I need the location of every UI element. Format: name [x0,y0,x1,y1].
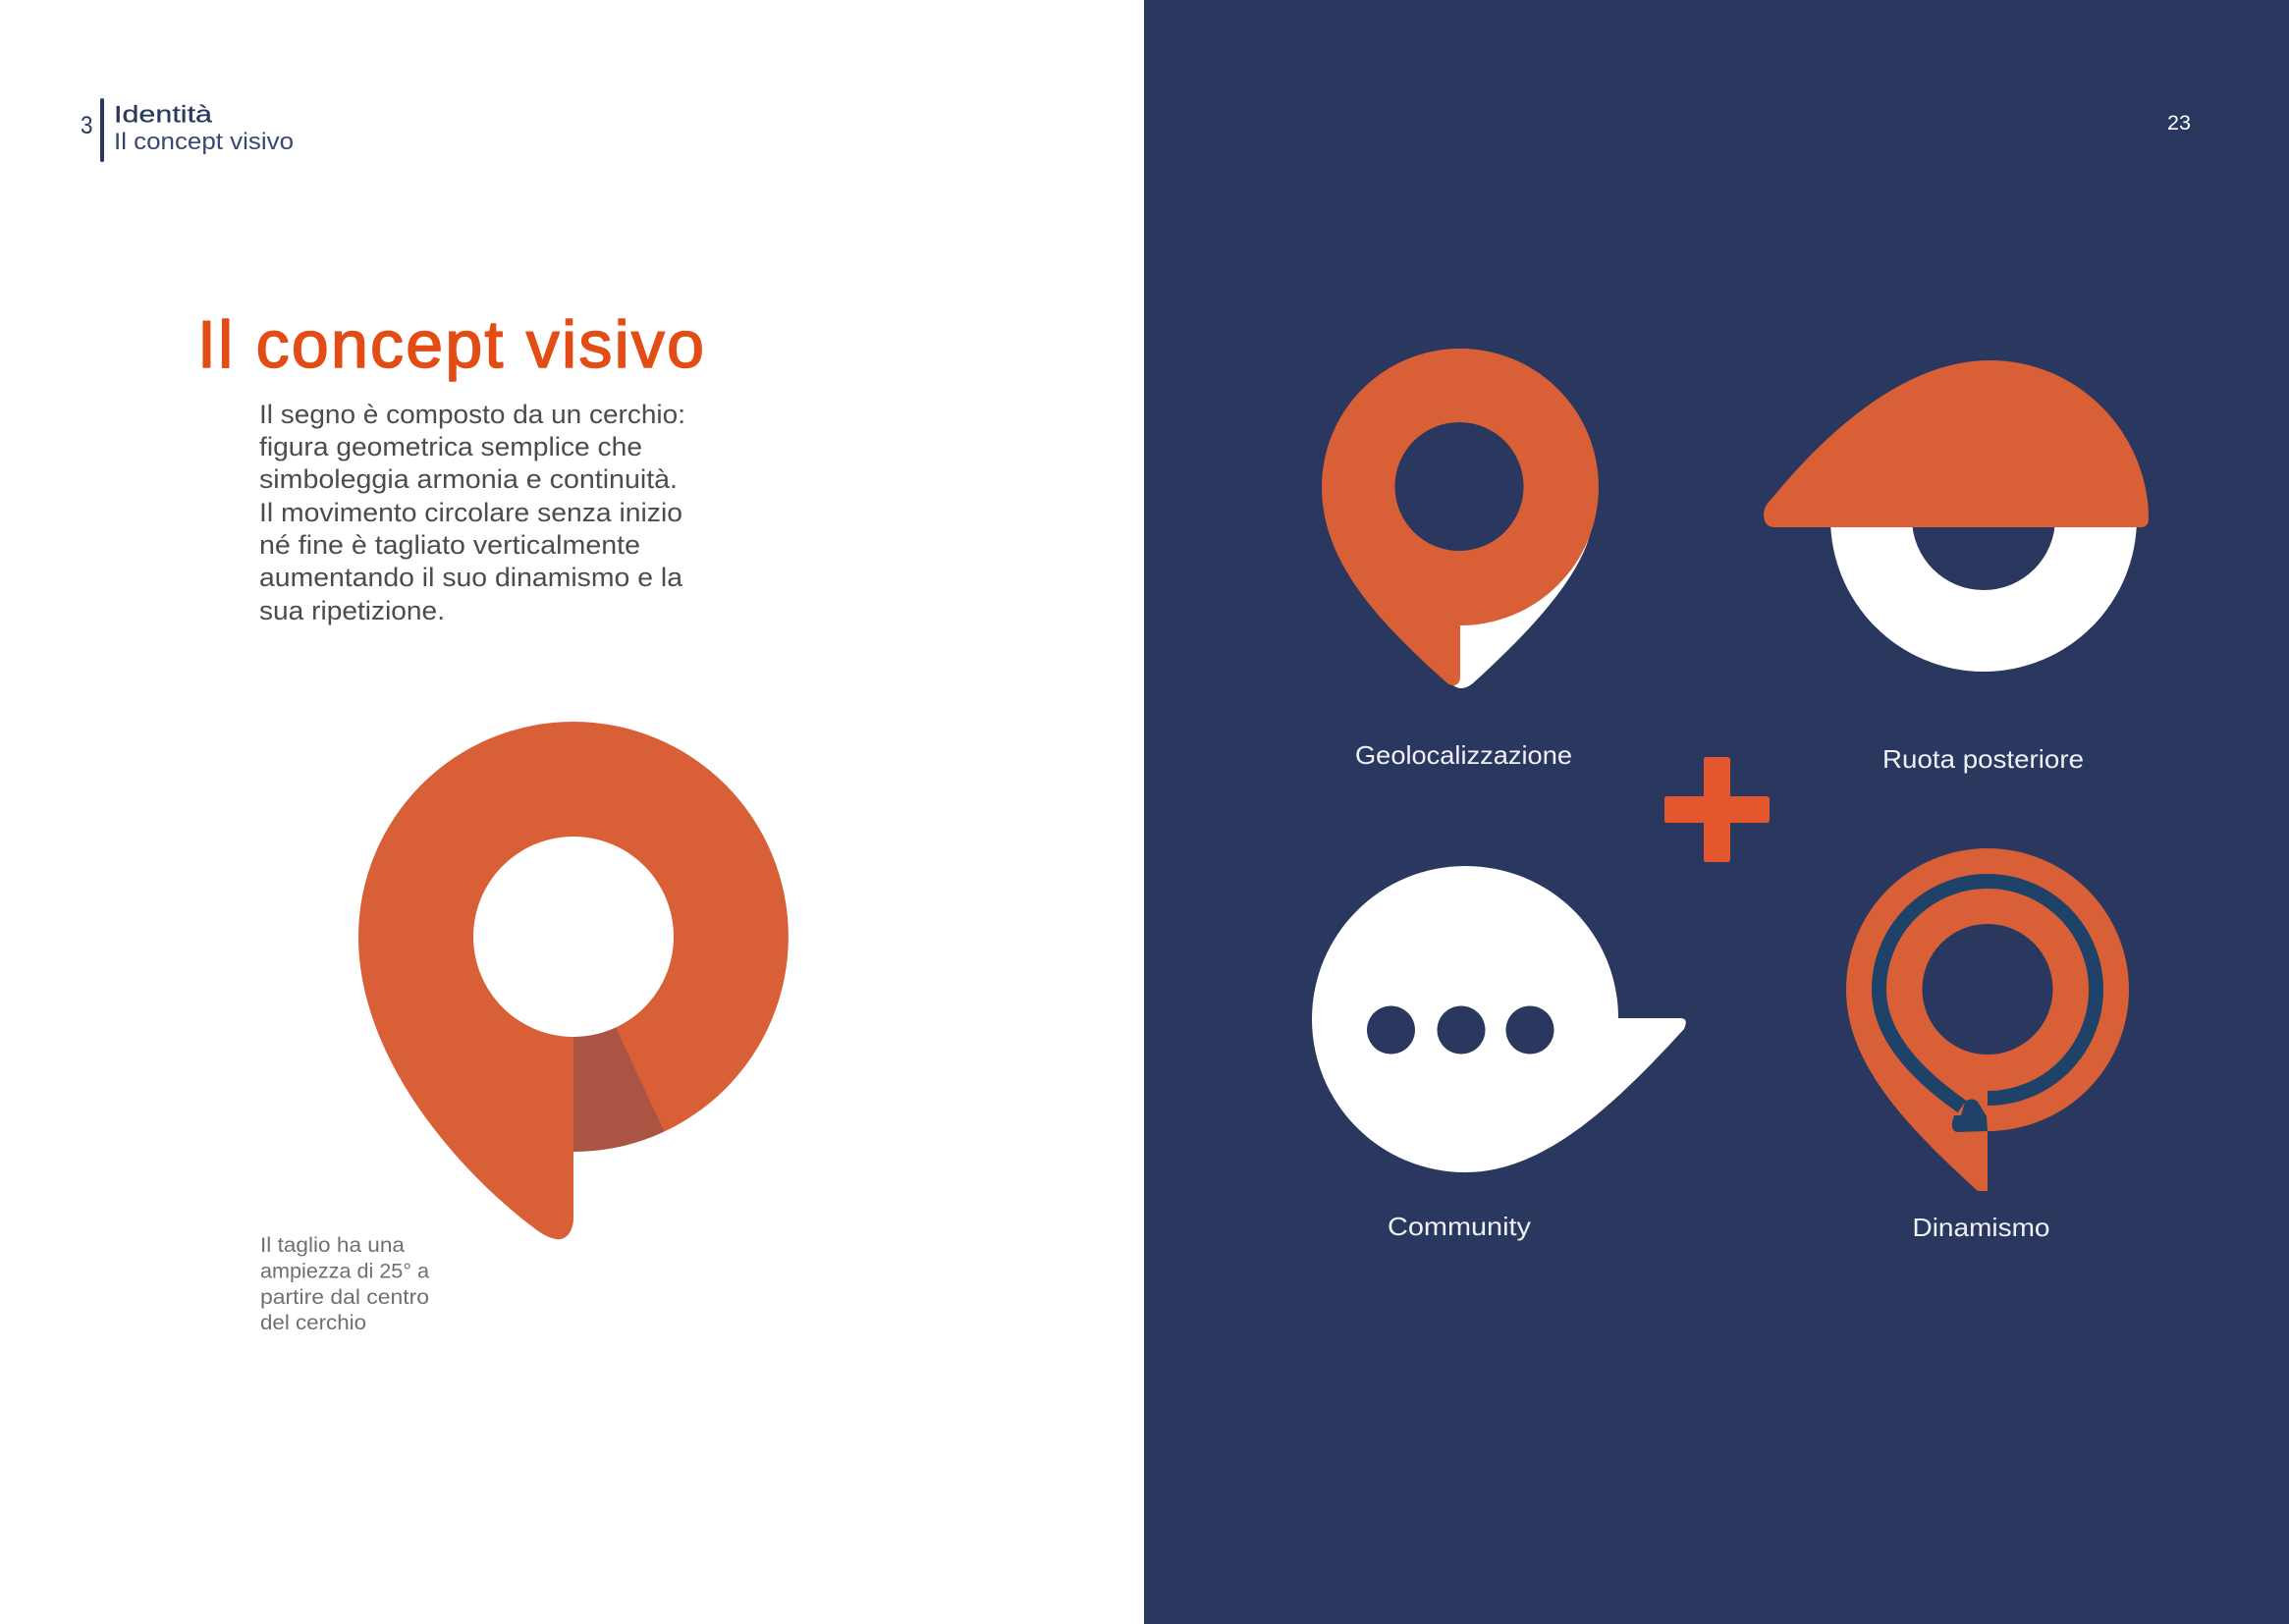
body text: figura geometrica semplice che [259,432,642,461]
icon: geolocation pin [1322,349,1599,688]
caption: partire dal centro [260,1286,429,1309]
label: Community: Community [1388,1212,1531,1241]
body text: né fine è tagliato verticalmente [259,530,640,560]
section number: 3 [81,112,92,139]
circular arrow line [1880,882,2096,1107]
label: Dinamismo: Dinamismo [1913,1213,2050,1242]
section subtitle: Il concept visivo [114,129,294,155]
page number: 23 [2167,112,2191,135]
arrow head [1952,1100,1988,1132]
body text: Il movimento circolare senza inizio [259,498,682,527]
icon: rear wheel [1764,360,2149,672]
icon: speech bubble [1312,866,1686,1172]
bubble shape [1312,866,1686,1172]
orange mudguard [1764,360,2149,527]
logo pin shape [358,722,789,1239]
body text: sua ripetizione. [259,596,445,625]
icon: dynamism pin [1846,848,2129,1191]
white pin shadow [1453,535,1590,688]
body text: Il segno è composto da un cerchio: [259,400,685,429]
label: Geolocalizzazione: Geolocalizzazione [1355,740,1572,770]
caption: ampiezza di 25° a [260,1261,429,1282]
icon: plus sign [1664,757,1770,862]
caption [260,1234,429,1334]
orange pin [1846,848,2129,1191]
body text: aumentando il suo dinamismo e la [259,563,683,592]
label: Ruota posteriore: Ruota posteriore [1882,744,2084,774]
white wheel [1830,518,2137,672]
large logo mark [358,722,789,1239]
dots [1367,1005,1415,1055]
caption: del cerchio [260,1312,366,1334]
section header [81,98,294,162]
title: Il concept visivo [197,307,704,382]
caption: Il taglio ha una [260,1234,405,1257]
panel: white left page [0,0,1144,1624]
panel: navy right page [1144,0,2289,1624]
orange pin [1322,349,1599,685]
section name: Identità [114,102,212,128]
header divider [100,98,104,162]
body text [259,400,685,625]
body text: simboleggia armonia e continuità. [259,464,678,494]
25 degree cut wedge [573,1027,664,1152]
